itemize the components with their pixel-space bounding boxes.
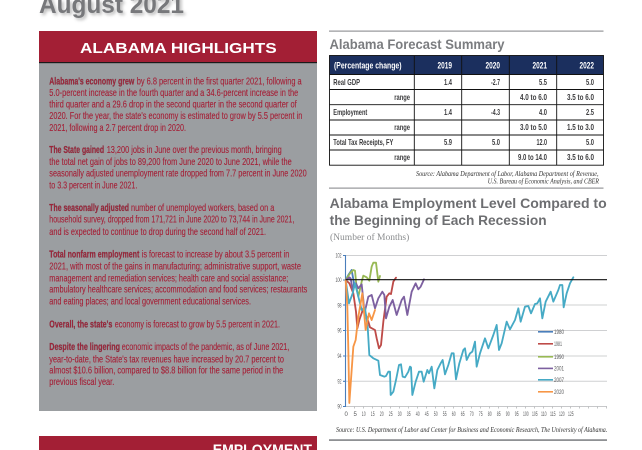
table: forecast summary: Total Tax Receipts, FY (333, 137, 394, 147)
x axis labels: 80 (488, 412, 492, 418)
table: forecast summary: 1.4 (444, 107, 452, 117)
legend: 2007 (554, 378, 564, 384)
table: forecast summary: 12.0 (536, 137, 547, 147)
x axis labels: 30 (398, 412, 402, 418)
source note: forecast table: U.S. Bureau of Economic Analysis, and CBER (488, 178, 600, 186)
subtitle: number of months: (Number of Months) (330, 232, 409, 242)
legend: 1980 (554, 330, 564, 336)
text block: economy growth (49, 76, 302, 134)
table: forecast summary: 5.0 (586, 137, 594, 147)
table: forecast summary: 3.0 to 5.0 (520, 122, 547, 132)
text block: economy growth: 2020. For the year, the state's economy is estimated to grow by 5.5 percent in (49, 110, 302, 122)
series 2020 (346, 280, 375, 403)
text block: overall forecast: economy is forecast to grow by 5.5 percent in 2021. (115, 318, 280, 330)
y axis labels: 102 (336, 254, 342, 260)
x axis labels: 115 (550, 412, 556, 418)
table: forecast summary: 4.0 to 6.0 (520, 92, 547, 102)
text block: economy growth: 5.0-percent increase in the fourth quarter and a 34.6-percent increase in the (49, 87, 298, 99)
x axis labels: 45 (425, 412, 429, 418)
y axis labels: 96 (338, 328, 342, 334)
table: forecast summary: -4.3 (491, 107, 500, 117)
x axis labels: 55 (443, 412, 447, 418)
table: forecast summary (330, 56, 604, 165)
table: forecast summary: range (394, 92, 410, 102)
panel: Employment header (39, 436, 317, 450)
text block: unemployed workers: household survey, dropped from 171,721 in June 2020 to 73,744 in June 2021, (49, 214, 294, 226)
x axis labels: 120 (559, 412, 565, 418)
text block: unemployed workers: and is expected to continue to drop during the second half of 2021. (49, 226, 266, 238)
x axis labels: 15 (371, 412, 375, 418)
text block: economy growth: by 6.8 percent in the first quarter 2021, following a (137, 76, 302, 88)
text block: jobs gained: 13,200 jobs in June over the previous month, bringing (107, 144, 282, 156)
x axis labels: 40 (416, 412, 420, 418)
x axis labels: 65 (461, 412, 465, 418)
x axis labels: 100 (523, 412, 529, 418)
table: forecast summary: (Percentage change) (334, 60, 402, 70)
text block: economy growth: Alabama's economy grew (49, 76, 135, 88)
text block: jobs gained: The State gained (49, 144, 104, 156)
x axis labels: 35 (407, 412, 411, 418)
legend: 2020 (554, 390, 564, 396)
text block: tax revenues: previous fiscal year. (49, 376, 114, 388)
table: forecast summary: 3.5 to 6.0 (567, 152, 594, 162)
text block: nonfarm employment: is forecast to increase by about 3.5 percent in (142, 249, 289, 261)
heading: employment level chart: the Beginning of Each Recession (330, 213, 547, 228)
table: forecast summary: 1.5 to 3.0 (567, 122, 594, 132)
source note: forecast table: Source: Alabama Department of Labor, Alabama Department of Revenue, (416, 170, 599, 178)
heading: Alabama Highlights: ALABAMA HIGHLIGHTS (80, 40, 277, 57)
table: forecast summary: range (394, 122, 410, 132)
x axis labels: 5 (354, 412, 358, 418)
table: forecast summary: Real GDP (333, 77, 360, 87)
x axis labels: 70 (470, 412, 474, 418)
table: forecast summary: -2.7 (491, 77, 500, 87)
heading: Alabama Highlights (39, 31, 317, 63)
y axis labels: 92 (338, 380, 342, 386)
table: forecast summary: 4.0 (539, 107, 547, 117)
y axis labels: 90 (338, 404, 342, 410)
text block: economy growth: third quarter and a 29.6 drop in the second quarter in the second quarter of (49, 98, 297, 110)
x axis labels: 10 (362, 412, 366, 418)
legend: 1990 (554, 355, 564, 361)
text block: unemployed workers (49, 202, 294, 238)
x axis labels: 125 (568, 412, 574, 418)
text block: nonfarm employment: management and remediation services; health care and social assistance; (49, 272, 288, 284)
heading: employment level chart: Alabama Employment Level Compared to (330, 196, 607, 211)
text block: unemployed workers: The seasonally adjusted (49, 202, 129, 214)
legend: 1981 (554, 342, 562, 348)
table: forecast summary: 3.5 to 6.0 (567, 92, 594, 102)
legend: 2001 (554, 367, 564, 373)
text block: overall forecast (49, 318, 280, 330)
text block: tax revenues: year-to-date, the State's tax revenues have increased by 20.7 percent to (49, 353, 284, 365)
x axis labels: 25 (389, 412, 393, 418)
text block: unemployed workers: number of unemployed workers, based on a (131, 202, 274, 214)
x axis labels: 75 (479, 412, 483, 418)
table: forecast summary: 5.0 (492, 137, 500, 147)
text block: nonfarm employment: ambulatory healthcare services; accommodation and food services; restaurants (49, 284, 307, 296)
table: forecast summary: 9.0 to 14.0 (518, 152, 547, 162)
table: forecast summary: 5.5 (539, 77, 547, 87)
text block: tax revenues: economic impacts of the pandemic, as of June 2021, (122, 341, 289, 353)
table: forecast summary: 5.0 (586, 77, 594, 87)
x axis labels: 90 (506, 412, 510, 418)
text block: jobs gained (49, 144, 307, 191)
x axis labels (344, 412, 574, 418)
x axis labels: 105 (532, 412, 538, 418)
x axis labels: 95 (515, 412, 519, 418)
x axis labels: 60 (452, 412, 456, 418)
x axis labels: 85 (497, 412, 501, 418)
y axis labels: 98 (338, 304, 342, 310)
text block: economy growth: 2021, following a 2.7 percent drop in 2020. (49, 122, 186, 134)
x axis labels: 20 (380, 412, 384, 418)
table: forecast summary: 2022 (580, 60, 594, 70)
text block: nonfarm employment: 2021, with most of the gains in manufacturing; administrative support, waste (49, 260, 301, 272)
line chart: employment by recession (336, 254, 607, 418)
table: forecast summary: 2019 (438, 60, 452, 70)
panel: Alabama highlights (39, 31, 317, 411)
y axis labels (336, 254, 342, 410)
text block: nonfarm employment: Total nonfarm employment (49, 249, 140, 261)
table: forecast summary: 2.5 (586, 107, 594, 117)
table: forecast summary: 2020 (486, 60, 500, 70)
text block: tax revenues (49, 341, 289, 388)
text block: nonfarm employment: and eating places; and local government educational services. (49, 295, 251, 307)
text block: jobs gained: seasonally adjusted unemployment rate dropped from 7.7 percent in June 2020 (49, 168, 307, 180)
text block: jobs gained: the total net gain of jobs to 89,200 from June 2020 to June 2021, while the (49, 156, 292, 168)
heading: Alabama Forecast Summary: Alabama Forecast Summary (330, 37, 505, 52)
text block: tax revenues: Despite the lingering (49, 341, 120, 353)
x axis labels: 110 (541, 412, 547, 418)
table: forecast summary: range (394, 152, 410, 162)
source note: forecast table (416, 170, 600, 186)
table: forecast summary: Employment (333, 107, 367, 117)
series 2007 (346, 277, 573, 395)
text block: tax revenues: almost $10.6 billion, compared to $8.8 billion for the same period in the (49, 364, 283, 376)
table: forecast summary: 5.9 (444, 137, 452, 147)
table: forecast summary: 2021 (532, 60, 547, 70)
heading: employment level chart (330, 196, 607, 228)
x axis labels: 50 (434, 412, 438, 418)
y axis labels: 94 (338, 354, 342, 360)
legend (538, 330, 564, 396)
text block: jobs gained: to 3.3 percent in June 2021. (49, 179, 137, 191)
series 1980, 1981, 1990, 2001, 2020 (346, 263, 424, 348)
table: forecast summary: 1.4 (444, 77, 452, 87)
y axis labels: 100 (336, 278, 342, 284)
x axis labels: 0 (344, 412, 348, 418)
text block: overall forecast: Overall, the state's (49, 318, 112, 330)
text block: nonfarm employment (49, 249, 307, 307)
